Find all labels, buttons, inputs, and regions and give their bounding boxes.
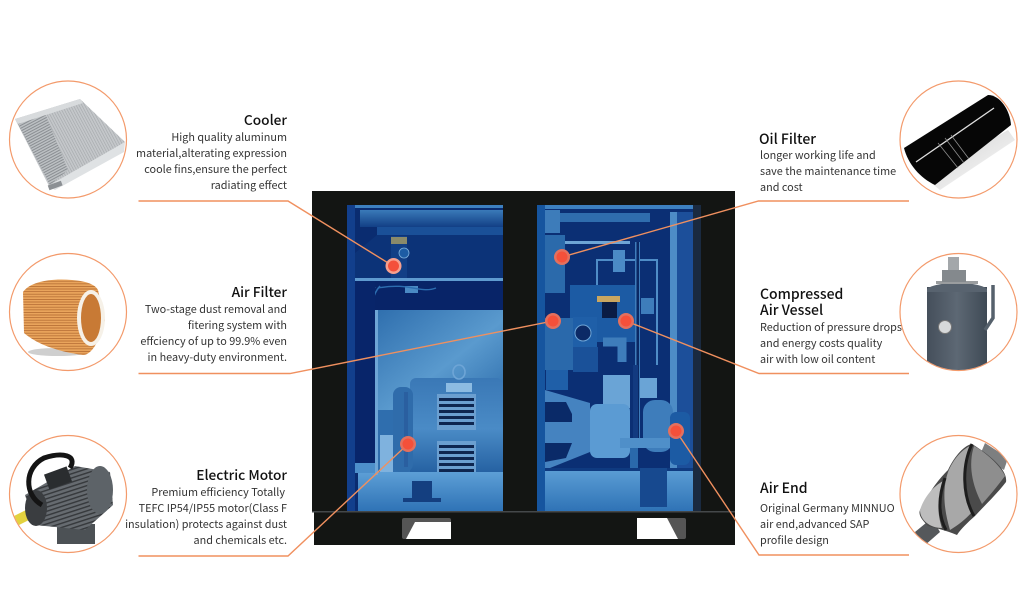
text: compressed air vessel: Reduction of pressure drops (760, 319, 902, 335)
text: electric motor: and chemicals etc. (194, 532, 287, 548)
hotspot markers (386, 249, 684, 452)
text: cooler: High quality aluminum (171, 129, 287, 145)
motor (393, 365, 503, 480)
text: electric motor: insulation) protects against dust (125, 516, 287, 532)
text: cooler: material,alterating expression (136, 145, 287, 161)
compressor cabinet (312, 191, 735, 545)
icon: air filter (10, 254, 126, 370)
blue enclosure panel (377, 310, 503, 410)
motor louvres (437, 394, 476, 479)
text: oil filter: and cost (760, 179, 803, 195)
text: oil filter: longer working life and (760, 147, 876, 163)
air end body (643, 400, 673, 452)
text: electric motor (125, 464, 287, 548)
text: cooler (136, 109, 287, 193)
text: compressed air vessel: air with low oil content (760, 351, 875, 367)
text: compressed air vessel: Compressed (760, 284, 843, 304)
separator tank (570, 285, 635, 342)
text: air filter: effciency of up to 99.9% even (140, 333, 287, 349)
text: cooler: coole fins,ensure the perfect (144, 161, 287, 177)
icon: air end screw rotor (900, 436, 1017, 552)
icon: compressed air vessel (900, 254, 1017, 372)
text: cooler: radiating effect (211, 177, 287, 193)
left compartment (347, 205, 503, 511)
base slots (312, 511, 735, 539)
text: oil filter (759, 129, 896, 195)
text: air filter: Air Filter (232, 281, 287, 301)
compressor housing (603, 375, 630, 408)
text: air end: profile design (760, 532, 829, 548)
text: cooler: Cooler (244, 109, 287, 129)
text: electric motor: Premium efficiency Totally (151, 484, 285, 500)
text: air end (760, 478, 895, 548)
text: compressed air vessel (760, 284, 902, 367)
right compartment (537, 205, 701, 511)
leader lines (138, 201, 909, 556)
text: air end: Original Germany MINNUO (760, 500, 895, 516)
text: air filter: Two-stage dust removal and (145, 301, 287, 317)
cabinet frame (312, 191, 735, 545)
text: compressed air vessel: Air Vessel (760, 300, 823, 320)
text: compressed air vessel: and energy costs quality (760, 335, 883, 351)
icon: cooler (10, 81, 126, 198)
text: electric motor: Electric Motor (196, 464, 287, 484)
text: oil filter: save the maintenance time (760, 163, 896, 179)
text: electric motor: TEFC IP54/IP55 motor(Class F (139, 500, 287, 516)
text: air end: Air End (760, 478, 808, 498)
icon: electric motor (10, 436, 126, 552)
text: air end: air end,advanced SAP (760, 516, 870, 532)
drive pulley (545, 390, 590, 470)
text: air filter: fitering system with (188, 317, 287, 333)
text: air filter (140, 281, 287, 365)
icon: oil filter (900, 81, 1017, 198)
text: air filter: in heavy-duty environment. (148, 349, 287, 365)
text: oil filter: Oil Filter (759, 129, 816, 149)
air filter housing (545, 318, 573, 370)
